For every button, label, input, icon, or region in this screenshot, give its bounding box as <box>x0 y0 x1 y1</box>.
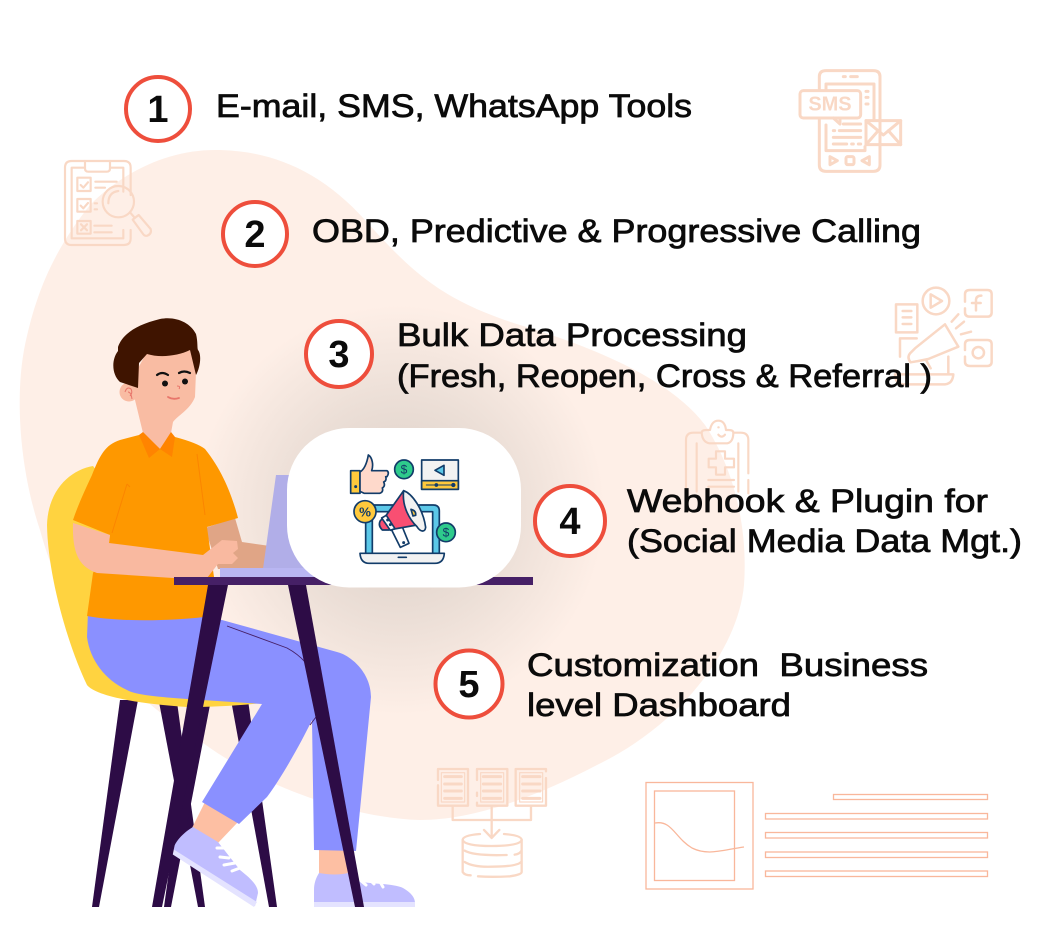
trousers <box>87 612 371 851</box>
collar <box>139 432 175 458</box>
icon: SMS phone with envelope: SMS <box>808 94 852 116</box>
shoe: rear <box>314 873 415 907</box>
laptop base <box>220 568 340 578</box>
neck and face <box>135 348 196 449</box>
step 4 <box>535 483 1022 559</box>
step 3: (Fresh, Reopen, Cross & Referral ) <box>397 358 932 394</box>
front arm <box>73 523 238 578</box>
megaphone <box>379 491 426 547</box>
white card <box>287 428 521 588</box>
laptop screen <box>263 475 310 569</box>
chair legs <box>92 700 277 907</box>
step 5 <box>436 647 928 723</box>
step 4: Webhook & Plugin for <box>627 483 988 519</box>
table top <box>174 577 533 585</box>
percent badge: % <box>359 504 371 519</box>
background blob <box>20 150 745 820</box>
step 3: Bulk Data Processing <box>397 317 747 353</box>
step 2: OBD, Predictive & Progressive Calling <box>312 213 921 249</box>
dollar coin bottom: $ <box>443 526 450 540</box>
step 3 <box>306 317 932 394</box>
rear leg skin <box>319 845 348 875</box>
dollar coin top: $ <box>401 463 408 477</box>
front leg skin <box>192 802 238 843</box>
icon: dashboard wireframe <box>646 782 988 889</box>
ear <box>120 382 138 402</box>
trouser crease <box>227 626 316 725</box>
shirt <box>73 435 238 620</box>
shirt folds <box>112 454 205 533</box>
laptop <box>360 505 444 563</box>
step 1: 1 <box>147 89 169 131</box>
chair seat <box>47 466 262 707</box>
step 1 <box>126 77 692 141</box>
thumbs up <box>351 455 388 493</box>
step 3: 3 <box>328 334 350 376</box>
icon: medical clipboard <box>686 421 748 493</box>
step 5: 5 <box>458 664 480 706</box>
icon: digital marketing <box>351 455 458 563</box>
step 2: 2 <box>244 214 266 256</box>
step 2 <box>223 202 921 266</box>
forearm behind <box>205 518 270 569</box>
icon: SMS phone with envelope <box>800 71 901 171</box>
table legs <box>152 585 364 907</box>
step 4: 4 <box>559 501 581 543</box>
icon: social media megaphone <box>895 288 992 384</box>
step 5: level Dashboard <box>527 687 791 723</box>
icon: data files into database <box>438 769 546 877</box>
video player <box>422 460 458 489</box>
step 1: E-mail, SMS, WhatsApp Tools <box>216 88 692 124</box>
eyes and eyebrows <box>157 372 190 399</box>
icon: clipboard with magnifier <box>65 161 151 245</box>
illustration: man at desk <box>47 318 533 907</box>
shoe: front <box>172 827 258 907</box>
step 5: Customization Business <box>527 647 928 683</box>
hair <box>113 318 200 388</box>
step 4: (Social Media Data Mgt.) <box>627 523 1022 559</box>
